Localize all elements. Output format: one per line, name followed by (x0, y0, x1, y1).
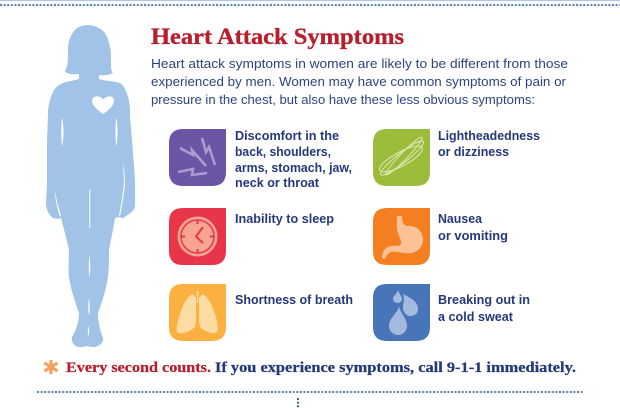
symptom: discomfort: neck or throat (235, 176, 320, 190)
icon: red clock (169, 208, 226, 265)
icon: green dizziness spirals (373, 129, 430, 186)
intro text block: Heart attack symptoms in women are likely to be different from those (151, 57, 568, 71)
symptom: discomfort: Discomfort in the (235, 129, 339, 143)
heading: Heart Attack Symptoms (151, 24, 404, 49)
symptom: nausea: Nausea (438, 212, 483, 226)
icon: orange stomach (373, 208, 430, 265)
intro text block: experienced by men. Women may have common symptoms of pain or (151, 75, 566, 89)
symptom: breaking out in a cold sweat: Breaking out in (438, 293, 530, 307)
intro text block: pressure in the chest, but also have these less obvious symptoms: (151, 93, 535, 107)
symptom: discomfort: arms, stomach, jaw, (235, 161, 352, 175)
symptom: breaking out in a cold sweat: a cold sweat (438, 310, 514, 324)
intro text block (151, 57, 568, 107)
symptom: discomfort (235, 129, 352, 190)
callout: every second counts: Every second counts. (66, 360, 211, 376)
symptom: breaking out in a cold sweat (438, 293, 530, 324)
figure: woman silhouette with heart (46, 25, 135, 347)
symptom: shortness of breath: Shortness of breath (235, 293, 353, 307)
icon: yellow lungs (169, 284, 226, 341)
icon: heart (92, 96, 114, 114)
symptom: lightheadedness: or dizziness (438, 145, 509, 159)
symptom: nausea: or vomiting (438, 229, 508, 243)
icon: purple lightning bolts (169, 129, 226, 186)
icon: orange asterisk (44, 360, 58, 374)
symptom: inability to sleep: Inability to sleep (235, 212, 334, 226)
symptom: discomfort: back, shoulders, (235, 145, 331, 159)
symptom: nausea (438, 212, 508, 243)
callout: every second counts: If you experience symptoms, call 9-1-1 immediately. (215, 360, 576, 376)
symptom: lightheadedness (438, 129, 540, 159)
symptom: lightheadedness: Lightheadedness (438, 129, 540, 143)
icon: blue sweat drops (373, 284, 430, 341)
